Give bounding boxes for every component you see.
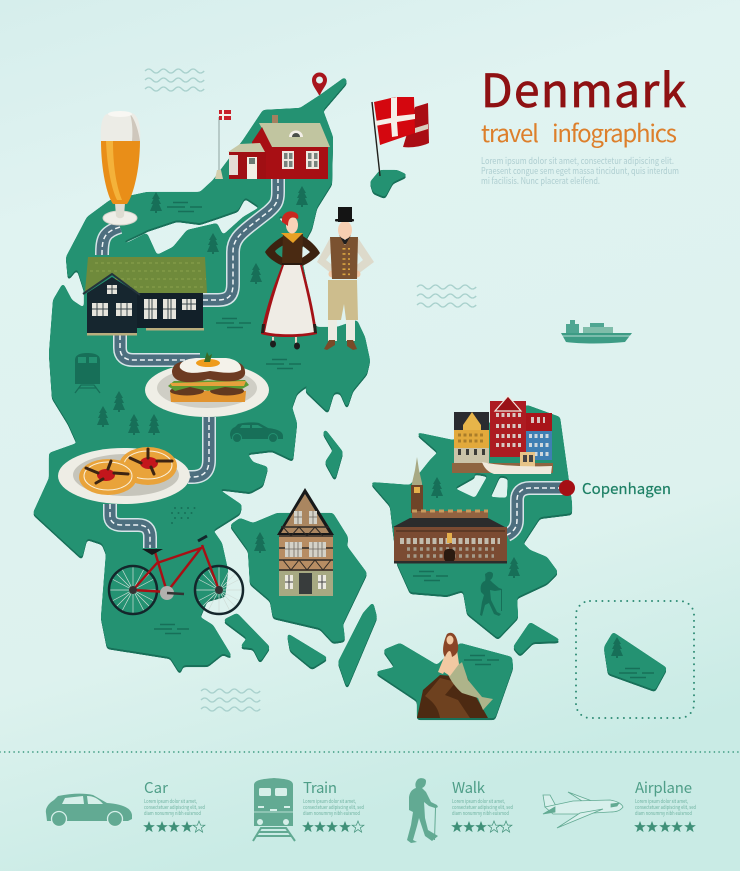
rating stars <box>451 821 512 832</box>
icon: plate of pastries <box>58 447 190 504</box>
panel: train <box>253 777 364 841</box>
island: Als <box>223 613 270 662</box>
description: consectetuer adipiscing elit, sed <box>452 803 513 811</box>
subtitle: infographics <box>552 114 677 149</box>
icon: train <box>253 778 295 841</box>
island: Bornholm <box>604 632 667 690</box>
icon: location pin <box>312 72 327 95</box>
description: consectetuer adipiscing elit, sed <box>303 803 364 811</box>
dots on map <box>172 508 198 523</box>
icon: small flag on pole <box>215 110 231 179</box>
description <box>452 797 513 817</box>
description: diam nonummy nibh euismod <box>144 809 201 817</box>
heading: Car: Car <box>144 777 168 798</box>
map of Denmark <box>33 77 667 718</box>
Copenhagen label: Copenhagen <box>582 478 671 499</box>
intro text: Praesent congue sem eget massa tincidunt, quis interdum <box>481 164 679 177</box>
icon: Little Mermaid on rock <box>417 633 493 718</box>
panel: car <box>46 777 205 832</box>
icon: half-timbered house <box>277 488 334 596</box>
island: Funen <box>230 513 367 642</box>
icon: airplane <box>543 792 623 828</box>
intro text: Lorem ipsum dolor sit amet, consectetur adipiscing elit. <box>481 154 674 167</box>
description <box>144 797 205 817</box>
island: Lolland <box>375 643 513 718</box>
intro text: mi facilisis. Nunc placerat eleifend. <box>481 174 600 187</box>
panel: airplane <box>543 777 696 832</box>
title: Denmark <box>481 55 686 121</box>
sea waves <box>145 69 476 711</box>
panel: walk <box>407 777 513 843</box>
icon: red farmhouse <box>228 115 330 179</box>
divider <box>0 751 740 753</box>
description: consectetuer adipiscing elit, sed <box>144 803 205 811</box>
description: Lorem ipsum dolor sit amet, <box>635 797 688 805</box>
icon: Nyhavn buildings and boat <box>452 396 553 474</box>
heading: Walk: Walk <box>452 777 486 798</box>
island: east of Jutland <box>323 429 343 480</box>
subtitle <box>481 114 677 149</box>
Copenhagen marker <box>559 480 575 496</box>
icon: beer glass <box>101 111 140 225</box>
island: Zealand <box>370 405 572 638</box>
icon: dish with egg sandwich <box>145 352 269 417</box>
trees on the map <box>97 186 623 658</box>
island: Mon <box>513 622 562 655</box>
icon: train silhouette on map <box>75 353 100 393</box>
subtitle: travel <box>481 114 539 149</box>
description: consectetuer adipiscing elit, sed <box>635 803 696 811</box>
rating stars <box>302 821 364 832</box>
icon: hiker silhouette on map <box>480 572 502 616</box>
icon: car silhouette on map <box>230 422 283 442</box>
description <box>635 797 696 817</box>
roads <box>102 179 563 548</box>
icon: turf-roof house <box>83 257 207 336</box>
icon: car <box>46 794 132 826</box>
icon: bicycle <box>109 536 243 614</box>
description: Lorem ipsum dolor sit amet, <box>303 797 356 805</box>
description: diam nonummy nibh euismod <box>303 809 360 817</box>
rating stars <box>634 821 696 832</box>
description: diam nonummy nibh euismod <box>635 809 692 817</box>
dotted box around Bornholm <box>576 601 694 718</box>
icon: big Danish flag <box>372 97 429 176</box>
icon: cargo ship <box>561 320 632 344</box>
description: diam nonummy nibh euismod <box>452 809 509 817</box>
grass marks on the map <box>154 202 654 678</box>
description: Lorem ipsum dolor sit amet, <box>144 797 197 805</box>
island: flag islet <box>370 170 408 197</box>
heading: Train: Train <box>303 777 337 798</box>
man in folk costume <box>317 207 374 350</box>
description <box>303 797 364 817</box>
description: Lorem ipsum dolor sit amet, <box>452 797 505 805</box>
rating stars <box>143 821 205 832</box>
Jutland <box>33 77 370 673</box>
icon: hiker <box>407 778 438 843</box>
intro text <box>481 154 679 187</box>
heading: Airplane: Airplane <box>635 777 692 798</box>
woman in folk costume <box>261 211 320 350</box>
icon: Copenhagen City Hall <box>393 457 507 564</box>
island: Langeland <box>338 602 377 688</box>
island: Aero <box>287 633 328 668</box>
